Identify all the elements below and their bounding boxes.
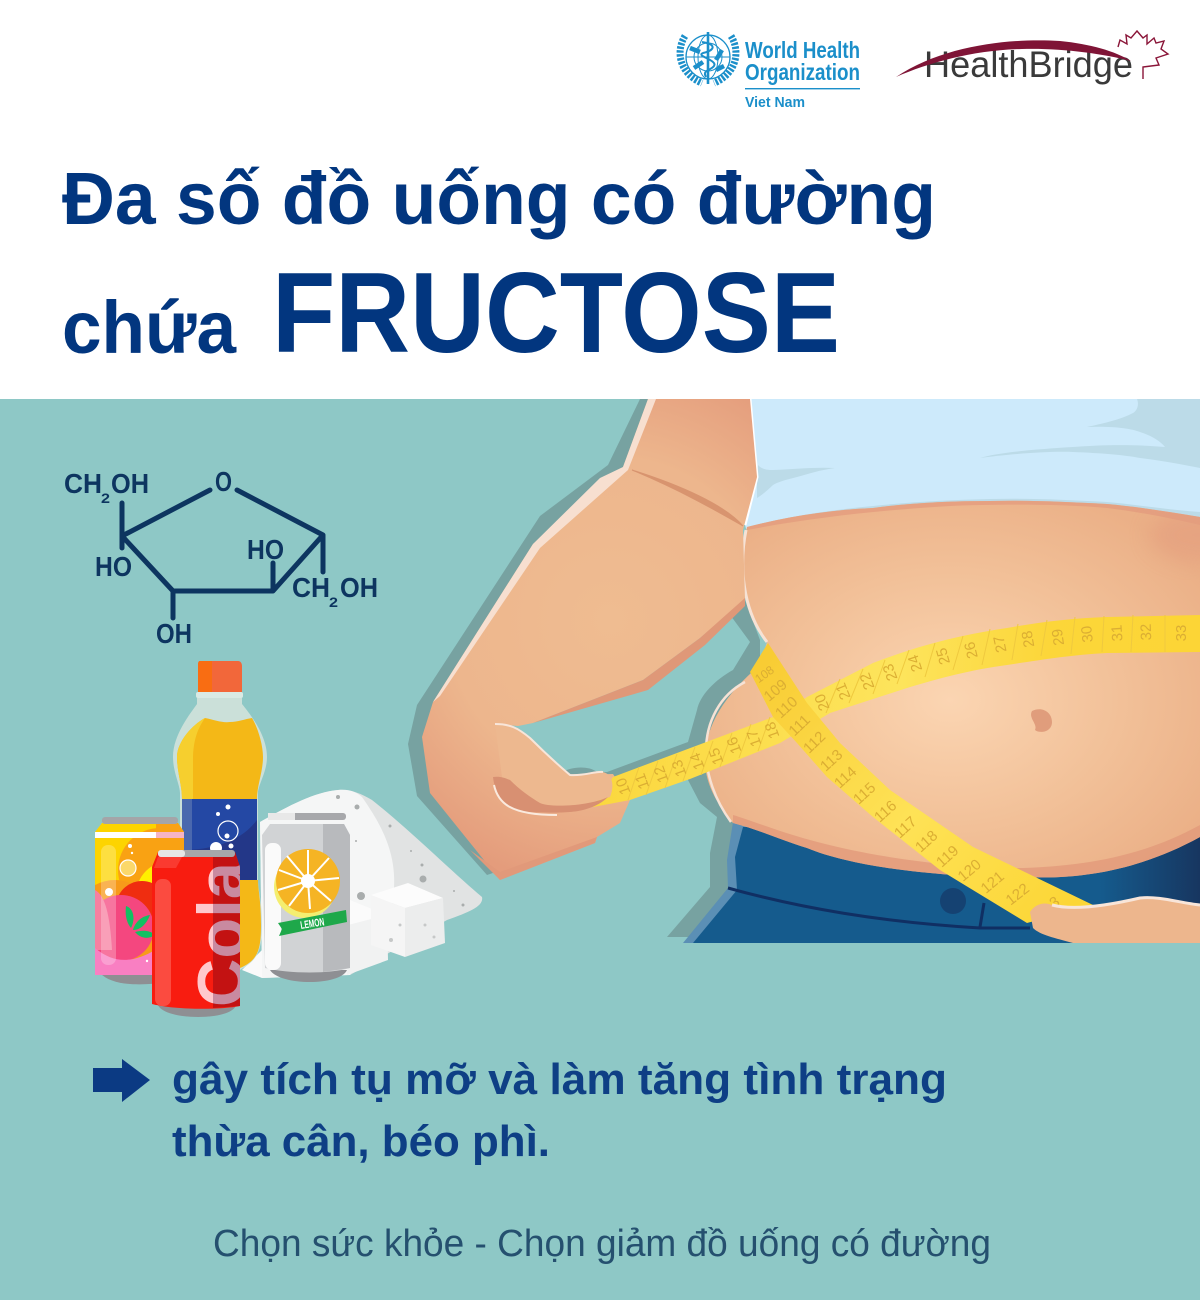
formula labels: HO [247,534,284,565]
bottle cap [198,661,242,692]
logo: HealthBridge [896,31,1168,85]
measuring tape: diagonal band: 113 [817,746,846,775]
measuring tape: diagonal band: 3 [1046,893,1063,912]
silhouette shadow: body [667,600,760,937]
formula labels: OH [111,468,149,499]
text: LEMON: LEMON [300,916,325,932]
measuring tape: waist band: 17 [744,727,765,749]
icon: maple leaf outline [1118,31,1168,79]
formula labels [64,466,378,649]
measuring tape: diagonal band: 112 [800,728,829,757]
belly [705,501,1200,878]
measuring tape: waist band: 23 [880,661,901,683]
measuring tape: waist band: 30 [1078,625,1097,643]
jeans waist seam [728,888,1030,928]
measuring tape: waist band: 28 [1019,629,1038,649]
measuring tape: diagonal band: 115 [850,779,879,808]
bottle ring [196,692,243,698]
molecule bonds [122,490,323,618]
formula labels: 2 [101,490,110,506]
measuring tape: waist band: 13 [669,757,690,779]
measuring tape: diagonal band: 121 [978,868,1008,897]
formula labels: OH [340,572,378,603]
measuring tape: waist band: 21 [833,680,855,702]
measuring tape: diagonal band: 118 [912,827,941,856]
label bubbles [210,804,234,854]
lower hand on belly [1030,898,1200,943]
measuring tape: waist band: 18 [762,719,783,741]
can: fruit [95,817,184,984]
icon: arrow [93,1059,150,1102]
sugar pile [260,790,482,978]
can: cola [152,850,240,1017]
formula labels: O [215,466,232,497]
bottle label [182,799,257,880]
icon: WHO emblem [680,32,736,84]
title word: chứa: chứa [62,286,237,369]
sugar cube: left [242,900,388,978]
jeans button [940,888,966,914]
measuring tape: waist band: 31 [1108,624,1127,642]
formula labels: CH [292,572,330,603]
measuring tape: waist band: 24 [905,653,926,674]
measuring tape: diagonal band: 110 [772,693,801,722]
measuring tape: waist band: 22 [857,670,878,692]
measuring tape: diagonal band: 117 [891,813,920,842]
bottle body [173,698,267,970]
measuring tape: waist band: 11 [632,771,653,791]
measuring tape: diagonal band: 122 [1003,880,1033,909]
bottle [173,661,267,970]
icon: navel [1031,709,1052,732]
measuring tape: waist band: 12 [651,763,672,785]
silhouette shadow: arm [408,399,648,875]
text: Organization: Organization [745,59,860,85]
logo: World Health Organization Viet Nam [680,32,860,111]
shirt [745,399,1200,532]
title word: FRUCTOSE: FRUCTOSE [272,250,840,377]
sugar cube: right [371,883,445,957]
title line 1: Đa số đồ uống có đường [62,157,936,240]
chemical structure: fructose [64,466,378,649]
jeans [683,822,1200,943]
silhouette shadow: thumb and tape [566,742,688,776]
formula labels: CH [64,468,102,499]
arm [422,399,757,880]
measuring tape: waist band: 32 [1138,623,1155,641]
icon: lemon slice [274,849,340,918]
can: lemon [262,813,350,982]
background: teal lower panel [0,399,1200,1300]
illustration: drinks and sugar [88,661,482,1017]
text: Viet Nam: Viet Nam [745,94,805,111]
measuring tape: diagonal band: 120 [955,856,985,885]
measuring tape: waist band: 27 [990,634,1011,654]
divider line under WHO name [745,88,860,89]
measuring tape: diagonal band: 114 [831,763,860,792]
measuring tape: diagonal band: 111 [786,712,814,740]
text: Cola label: Cola [184,861,260,1007]
measuring tape: waist band: 15 [706,745,727,767]
formula labels: HO [95,551,132,582]
measuring tape: waist band [593,615,1200,807]
body text line 2: thừa cân, béo phì. [172,1117,550,1166]
jeans fly seam [980,903,984,927]
measuring tape: waist band: 26 [961,640,982,660]
text: HealthBridge wordmark: HealthBridge [924,44,1133,85]
measuring tape: diagonal band [750,643,1093,923]
formula labels: 2 [329,594,338,610]
measuring tape: waist band: 33 [1173,625,1190,641]
measuring tape: waist band: 20 [812,691,834,713]
measuring tape: diagonal band: 119 [933,842,962,871]
text: World Health: World Health [745,37,860,63]
measuring tape: waist band: 10 [613,775,634,797]
footer slogan: Chọn sức khỏe - Chọn giảm đồ uống có đường [213,1223,991,1265]
icon: bridge arc [896,40,1131,77]
measuring tape: diagonal band: 109 [761,676,791,705]
measuring tape: diagonal band: 108 [752,663,777,686]
formula labels: OH [156,618,192,649]
bottle liquid [177,718,263,799]
measuring tape: waist band: 16 [724,734,745,756]
measuring tape: waist band: 29 [1049,628,1068,647]
illustration: person measuring waist [408,399,1200,943]
thumb and palm crease [493,724,612,815]
measuring tape: diagonal band: 116 [871,797,900,826]
measuring tape: waist band: 25 [933,646,954,667]
lemon banner [278,910,347,936]
body text line 1: gây tích tụ mỡ và làm tăng tình trạng [172,1055,947,1104]
measuring tape: waist band: 14 [687,750,708,772]
